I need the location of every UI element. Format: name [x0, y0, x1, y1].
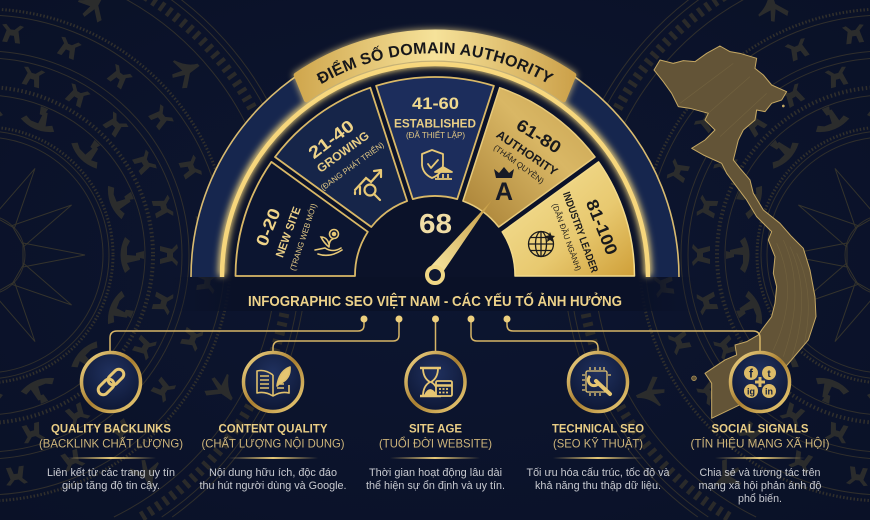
factor: content quality: CONTENT QUALITY [218, 422, 328, 436]
factor: quality backlinks [39, 352, 183, 492]
factor: site age: thể hiện sự ổn định và uy tín. [366, 480, 505, 492]
factor: content quality [200, 352, 346, 492]
segment 41-60 [376, 77, 494, 199]
segment 41-60: (ĐÃ THIẾT LẬP) [406, 130, 465, 140]
icon: social networks: t [767, 369, 771, 380]
factor: quality backlinks: Liên kết từ các trang uy tín [47, 467, 175, 479]
factor: site age: Thời gian hoạt động lâu dài [369, 467, 502, 479]
factor: quality backlinks: (BACKLINK CHẤT LƯỢNG) [39, 436, 183, 450]
inner dark dial [222, 64, 648, 277]
segment 61-80: 61-80 [513, 115, 565, 157]
score value: 68 [419, 208, 452, 239]
factor: site age: SITE AGE [409, 422, 462, 436]
segment 0-20 [236, 162, 368, 276]
icon: hourglass and calendar [406, 352, 465, 412]
icon: chain link [82, 352, 140, 412]
icon: social networks: f [749, 366, 754, 380]
title banner: ĐIỂM SỐ DOMAIN AUTHORITY [316, 42, 554, 84]
icon: crowned A: A [495, 178, 513, 206]
factor: technical seo: Tối ưu hóa cấu trúc, tốc độ và [526, 467, 670, 479]
segment 61-80: (THẨM QUYỀN) [492, 142, 546, 186]
outer gauge line [191, 33, 679, 277]
factor: content quality: Nội dung hữu ích, độc đáo [209, 467, 337, 479]
segment 41-60: 41-60 [412, 94, 459, 113]
icon: social networks: ig [747, 386, 755, 396]
factor: social signals: (TÍN HIỆU MẠNG XÃ HỘI) [690, 436, 830, 450]
segment 21-40 [275, 88, 407, 227]
segment 21-40: 21-40 [305, 116, 358, 163]
map of Vietnam [654, 46, 816, 418]
segment 61-80: AUTHORITY [494, 127, 560, 179]
factor: social signals: mạng xã hội phản ánh độ [698, 480, 822, 492]
factor: quality backlinks: QUALITY BACKLINKS [51, 422, 171, 436]
icon: globe with star [528, 232, 555, 256]
segment 21-40: GROWING [314, 128, 372, 176]
factor: technical seo: khả năng thu thập dữ liệu. [535, 480, 661, 492]
segment 41-60: ESTABLISHED [394, 116, 476, 130]
segment 81-100: 81-100 [582, 197, 621, 258]
outer gauge band [191, 33, 679, 277]
subtitle backdrop [170, 277, 700, 311]
factor: quality backlinks: giúp tăng độ tin cậy. [62, 480, 160, 492]
segment 0-20: NEW SITE [274, 205, 304, 259]
right bronze drum pattern [563, 0, 870, 517]
title banner [294, 30, 576, 102]
icon: chip and wrench [568, 352, 628, 412]
segment 21-40: (ĐANG PHÁT TRIỂN) [319, 140, 386, 192]
factor: technical seo: (SEO KỸ THUẬT) [553, 436, 643, 450]
icon: shield and bank [422, 150, 452, 179]
segment 81-100 [502, 162, 634, 276]
factor: social signals: phổ biến. [738, 493, 782, 505]
icon: open book and quill [244, 352, 302, 412]
factor: social signals [690, 352, 830, 505]
gold ring glow [222, 63, 648, 276]
icon: growth and magnifier [355, 170, 381, 200]
icon: social networks: in [765, 386, 773, 396]
factor: technical seo [526, 352, 670, 492]
segment 0-20: (TRANG WEB MỚI) [288, 202, 319, 272]
factor: content quality: thu hút người dùng và Google. [200, 480, 346, 492]
segment 0-20: 0-20 [252, 206, 285, 249]
icon: social networks [730, 352, 790, 412]
segment 81-100: INDUSTRY LEADER [560, 190, 600, 275]
gauge [190, 24, 680, 285]
factor: social signals: Chia sẻ và tương tác trên [700, 467, 820, 479]
icon: hand with flower [315, 230, 342, 255]
left bronze drum pattern [0, 0, 307, 517]
connector lines [110, 316, 760, 352]
factor: site age [366, 352, 505, 492]
factor: technical seo: TECHNICAL SEO [552, 422, 644, 436]
gold ring [222, 64, 648, 277]
factor: social signals: SOCIAL SIGNALS [712, 422, 808, 436]
subtitle: INFOGRAPHIC SEO VIỆT NAM - CÁC YẾU TỐ ẢNH HƯỞNG [248, 292, 622, 310]
banner glow [296, 32, 574, 100]
gauge needle [427, 200, 492, 283]
factor: site age: (TUỔI ĐỜI WEBSITE) [379, 436, 492, 450]
factor: content quality: (CHẤT LƯỢNG NỘI DUNG) [202, 436, 344, 450]
segment 81-100: (DẪN ĐẦU NGÀNH) [550, 202, 584, 272]
segment 61-80 [463, 88, 595, 227]
